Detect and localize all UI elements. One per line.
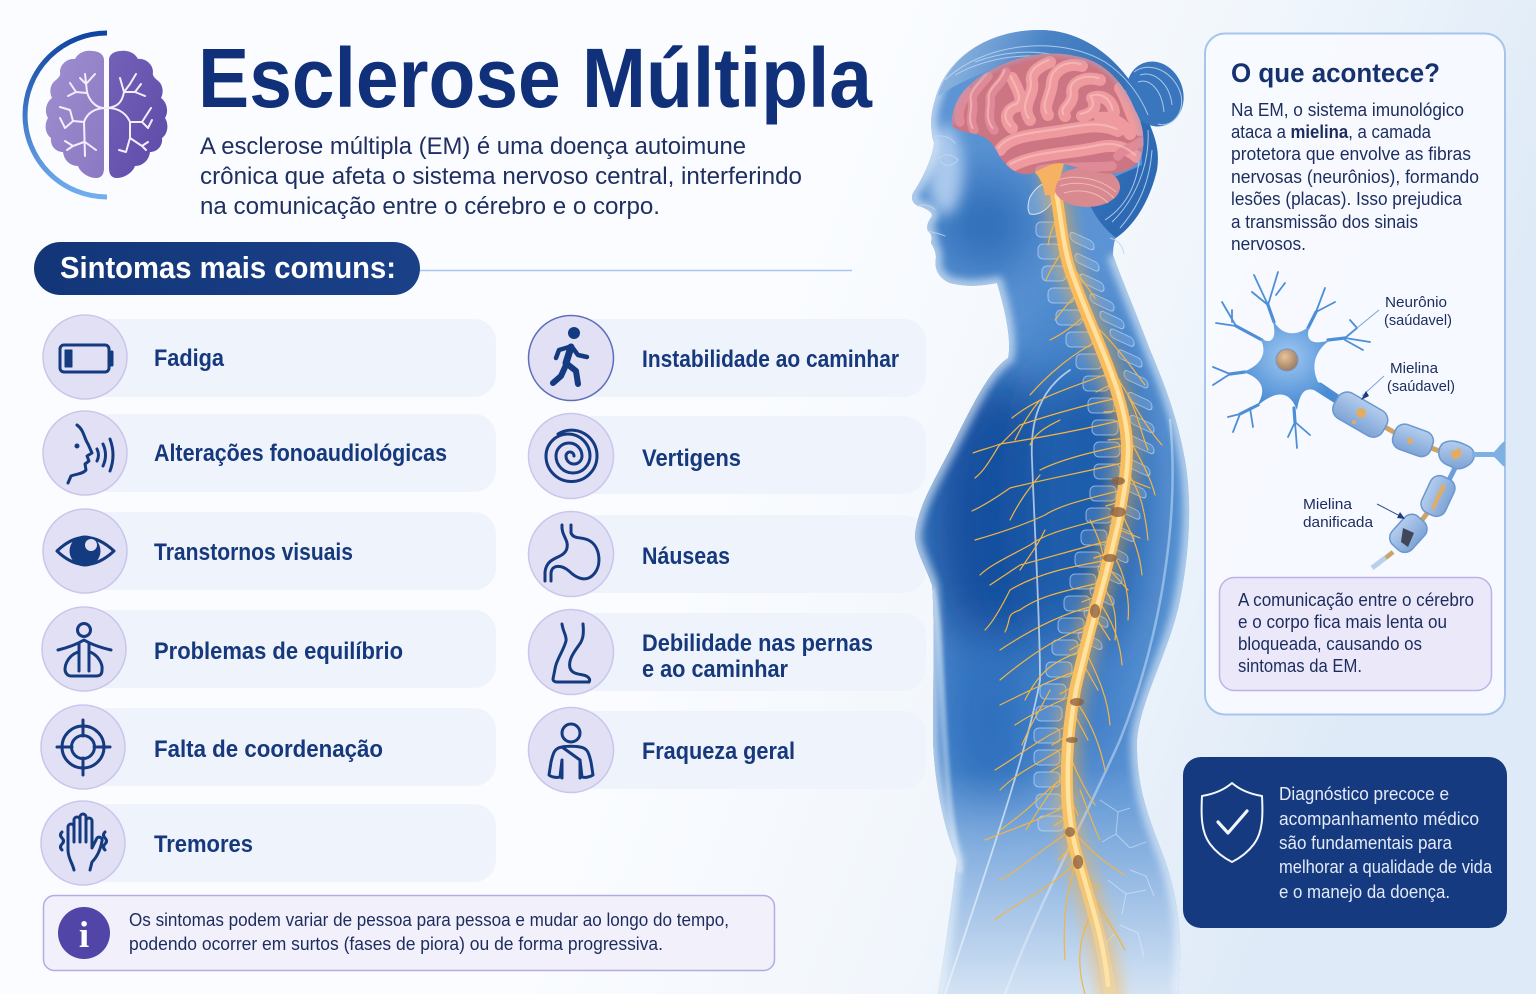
symptom: Falta de coordenação: Falta de coordenação bbox=[154, 736, 383, 763]
symptom: Alterações fonoaudiológicas bbox=[43, 411, 496, 495]
body silhouette bbox=[900, 20, 1200, 994]
logo: brain with arc bbox=[25, 33, 167, 197]
symptom: Instabilidade ao caminhar bbox=[528, 316, 926, 400]
icon: trembling hand bbox=[60, 814, 106, 870]
panel text: ataca a mielina, a camada bbox=[1231, 122, 1432, 142]
symptom: Náuseas bbox=[528, 512, 926, 596]
labels: Mielina bbox=[1303, 496, 1353, 513]
panel: diagnóstico: melhorar a qualidade de vida bbox=[1279, 857, 1493, 877]
callout: info note bbox=[44, 896, 774, 970]
intro text: crônica que afeta o sistema nervoso central, interferindo bbox=[200, 163, 802, 190]
labels: (saúdavel) bbox=[1384, 312, 1452, 329]
icon: stomach bbox=[545, 525, 599, 581]
panel text: Na EM, o sistema imunológico bbox=[1231, 100, 1464, 120]
symptom: Náuseas: Náuseas bbox=[642, 543, 730, 570]
symptom: Fadiga bbox=[43, 315, 496, 399]
symptom: Fadiga: Fadiga bbox=[154, 345, 225, 372]
cerebellum bbox=[1030, 160, 1120, 207]
intro text bbox=[200, 133, 802, 220]
labels: (saúdavel) bbox=[1387, 378, 1455, 395]
neuron diagram bbox=[1213, 272, 1505, 568]
title: Esclerose Múltipla bbox=[198, 31, 873, 125]
heading: sintomas bbox=[34, 242, 852, 295]
symptom: Alterações fonoaudiológicas: Alterações fonoaudiológicas bbox=[154, 440, 447, 467]
panel heading: O que acontece? bbox=[1231, 58, 1440, 88]
icon: balance bbox=[58, 624, 111, 676]
spinal cord bbox=[1050, 165, 1128, 994]
icon: walking person bbox=[553, 327, 587, 384]
symptom: Tremores: Tremores bbox=[154, 831, 253, 858]
callout: comunicação: sintomas da EM. bbox=[1238, 656, 1362, 676]
icon: battery bbox=[60, 345, 112, 372]
icon: eye bbox=[57, 536, 114, 566]
intro text: na comunicação entre o cérebro e o corpo. bbox=[200, 193, 660, 220]
panel text bbox=[1231, 100, 1479, 254]
icon: shield check bbox=[1202, 783, 1262, 862]
lumbar pale structures bbox=[1100, 800, 1154, 957]
symptom: Debilidade nas pernas: Debilidade nas pernas bbox=[642, 630, 873, 657]
symptom: Fraqueza geral: Fraqueza geral bbox=[642, 738, 795, 765]
callout: comunicação bbox=[1220, 578, 1492, 690]
callout: info note: Os sintomas podem variar de pessoa para pessoa e mudar ao longo do tempo, bbox=[129, 910, 729, 930]
panel: diagnóstico: e o manejo da doença. bbox=[1279, 882, 1450, 902]
panel text: nervosas (neurônios), formando bbox=[1231, 167, 1479, 187]
soft inner edge glow bbox=[912, 30, 1189, 994]
icon: leg and foot bbox=[553, 624, 590, 682]
panel: diagnóstico: são fundamentais para bbox=[1279, 833, 1453, 853]
icon: speaking face bbox=[68, 425, 113, 483]
icon: info: i bbox=[79, 915, 89, 956]
symptom: Fraqueza geral bbox=[528, 708, 926, 792]
nerves bbox=[972, 215, 1162, 994]
symptom: Debilidade nas pernas bbox=[528, 610, 926, 694]
symptom: Vertigens bbox=[528, 414, 926, 498]
callout: comunicação: e o corpo fica mais lenta ou bbox=[1238, 612, 1447, 632]
icon: target bbox=[57, 720, 110, 775]
face details bbox=[919, 136, 958, 236]
panel: diagnóstico: Diagnóstico precoce e bbox=[1279, 784, 1449, 804]
symptom: Tremores bbox=[41, 801, 496, 885]
icon: person outline bbox=[549, 724, 593, 778]
symptom: Problemas de equilíbrio bbox=[42, 607, 496, 691]
symptom: Falta de coordenação bbox=[41, 705, 496, 789]
jaw glass structure bbox=[1028, 183, 1058, 214]
symptom: Instabilidade ao caminhar: Instabilidade ao caminhar bbox=[642, 346, 899, 373]
icon: spiral bbox=[546, 430, 597, 482]
callout: comunicação: bloqueada, causando os bbox=[1238, 634, 1422, 654]
heading: sintomas: Sintomas mais comuns: bbox=[60, 250, 396, 285]
symptom: Problemas de equilíbrio: Problemas de equilíbrio bbox=[154, 638, 403, 665]
symptom: Vertigens: Vertigens bbox=[642, 445, 741, 472]
panel: diagnóstico bbox=[1183, 757, 1507, 928]
arm contour lights bbox=[932, 370, 1173, 994]
panel text: nervosos. bbox=[1231, 234, 1306, 254]
vertebrae bbox=[1034, 222, 1154, 831]
labels bbox=[1303, 294, 1455, 531]
intro text: A esclerose múltipla (EM) é uma doença autoimune bbox=[200, 133, 746, 160]
icon: info bbox=[58, 907, 110, 959]
pointer arrows bbox=[1357, 310, 1405, 519]
bottom fade bbox=[938, 782, 1180, 994]
brain bbox=[952, 54, 1144, 174]
panel text: a transmissão dos sinais bbox=[1231, 212, 1418, 232]
myelin segments bbox=[1329, 388, 1505, 568]
symptom: Transtornos visuais: Transtornos visuais bbox=[154, 539, 353, 566]
labels: Mielina bbox=[1390, 360, 1439, 377]
callout: comunicação: A comunicação entre o cérebro bbox=[1238, 590, 1474, 610]
panel text: protetora que envolve as fibras bbox=[1231, 144, 1471, 164]
symptom: Debilidade nas pernas: e ao caminhar bbox=[642, 656, 788, 683]
labels: danificada bbox=[1303, 514, 1374, 531]
callout: info note: podendo ocorrer em surtos (fases de piora) ou de forma progressiva. bbox=[129, 934, 663, 954]
panel text: lesões (placas). Isso prejudica bbox=[1231, 189, 1463, 209]
hair bbox=[938, 30, 1193, 254]
labels: Neurônio bbox=[1385, 294, 1447, 311]
anatomical figure bbox=[900, 20, 1200, 994]
panel: diagnóstico: acompanhamento médico bbox=[1279, 809, 1479, 829]
symptom: Transtornos visuais bbox=[43, 509, 496, 593]
panel: o que acontece bbox=[1205, 34, 1505, 714]
